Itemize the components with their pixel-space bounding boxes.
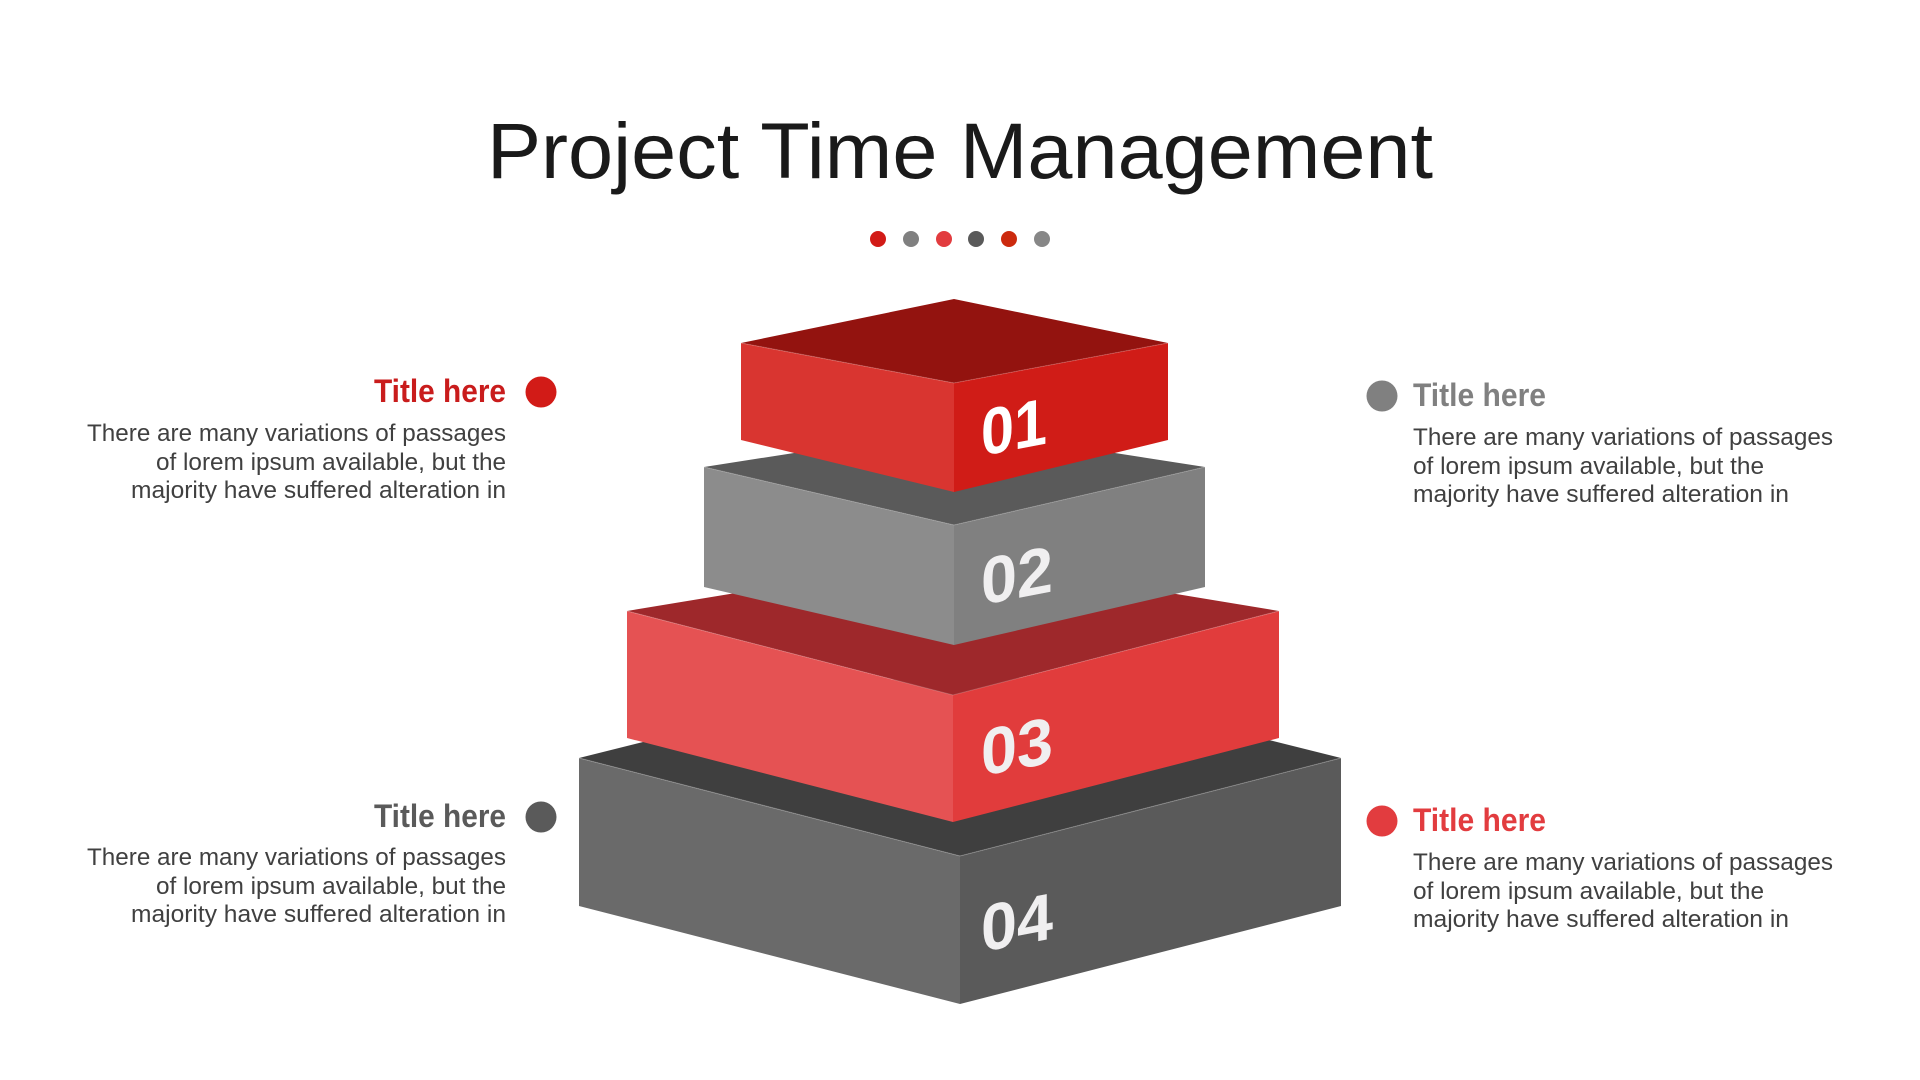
callout body: There are many variations of passages <box>87 844 506 871</box>
callout body: of lorem ipsum available, but the <box>156 873 506 900</box>
pyramid tier 03 <box>627 557 1279 822</box>
callout body <box>87 844 506 928</box>
number 01: 01 <box>981 385 1047 471</box>
callout: bottom right <box>1366 802 1833 933</box>
callout title: Title here <box>1413 377 1546 413</box>
number 04: 04 <box>981 880 1053 967</box>
callout body: There are many variations of passages <box>87 420 506 447</box>
callout body: majority have suffered alteration in <box>131 477 506 504</box>
callout body: There are many variations of passages <box>1413 424 1833 451</box>
marker dot dark grey <box>526 802 556 832</box>
callout title: Title here <box>1413 802 1546 838</box>
callout body: There are many variations of passages <box>1413 849 1833 876</box>
callout body: majority have suffered alteration in <box>131 901 506 928</box>
callout body: of lorem ipsum available, but the <box>156 449 506 476</box>
callout body: majority have suffered alteration in <box>1413 481 1789 508</box>
marker dot grey <box>1366 380 1398 412</box>
number 03: 03 <box>981 704 1053 791</box>
callout body <box>87 420 506 504</box>
callout: top right <box>1366 377 1833 508</box>
callout body: of lorem ipsum available, but the <box>1413 453 1764 480</box>
pyramid tier 01 <box>741 299 1168 492</box>
callout body: majority have suffered alteration in <box>1413 906 1789 933</box>
pyramid tier 02 <box>704 428 1205 645</box>
marker dot light red <box>1366 806 1398 836</box>
title: Project Time Management <box>487 106 1433 195</box>
callout body <box>1413 849 1833 933</box>
decorative dot row <box>870 231 1050 247</box>
callout body: of lorem ipsum available, but the <box>1413 878 1764 905</box>
callout title: Title here <box>374 373 506 409</box>
number 02: 02 <box>981 533 1053 620</box>
marker dot red <box>526 376 556 408</box>
pyramid tier 04 <box>579 663 1341 1004</box>
callout title: Title here <box>374 798 506 834</box>
callout: bottom left <box>87 798 556 928</box>
callout body <box>1413 424 1833 508</box>
callout: top left <box>87 373 556 504</box>
